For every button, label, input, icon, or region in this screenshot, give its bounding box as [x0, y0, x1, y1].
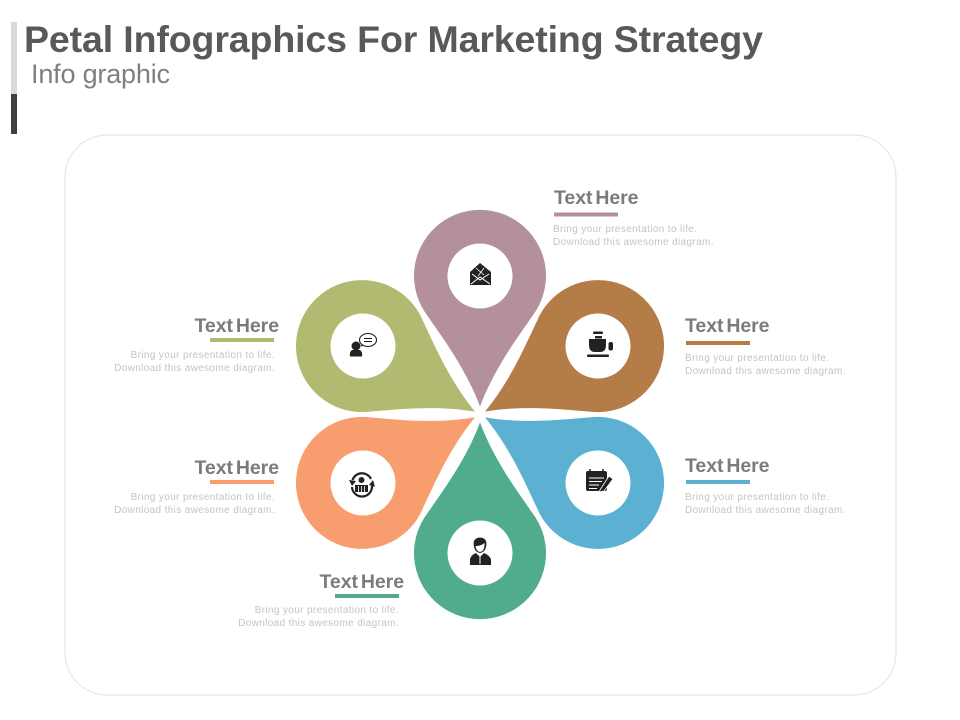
icon: coffee cup [587, 332, 613, 357]
petal: orange [272, 360, 508, 573]
label: left orange [114, 457, 279, 516]
label: right brown: Bring your presentation to life. [685, 353, 829, 364]
label: top mauve: Download this awesome diagram. [553, 237, 714, 248]
icon: open envelope [470, 263, 491, 285]
label: top mauve: Text Here [554, 187, 639, 209]
petal: green [414, 422, 546, 619]
label: left orange: Bring your presentation to life. [131, 492, 275, 503]
label: left olive [114, 315, 279, 374]
label: right brown: Download this awesome diagram. [685, 366, 846, 377]
label: top mauve: Bring your presentation to life. [553, 224, 697, 235]
petal: blue [452, 360, 688, 573]
icon: team with circular arrows [349, 473, 375, 497]
label: right blue [685, 455, 846, 516]
label: right blue: Bring your presentation to life. [685, 492, 829, 503]
label: left orange: Download this awesome diagram. [114, 505, 275, 516]
label: bottom green: Download this awesome diagram. [238, 618, 399, 629]
petal: brown [452, 256, 688, 469]
label: bottom green: Text Here [320, 571, 404, 593]
label: bottom green: Bring your presentation to life. [255, 605, 399, 616]
title: Petal Infographics For Marketing Strategy [24, 18, 763, 60]
icon: person with speech bubble [350, 334, 376, 356]
label: right blue: Text Here [685, 455, 770, 477]
panel: diagram background [65, 135, 896, 695]
title accent bar [11, 22, 17, 134]
subtitle: Info graphic [31, 59, 170, 89]
petal: mauve [414, 210, 546, 406]
label: right brown: Text Here [685, 315, 770, 337]
icon: calendar with pencil [586, 469, 613, 492]
icon: businessman [470, 538, 491, 565]
label: right blue: Download this awesome diagram. [685, 505, 846, 516]
petal: olive [272, 256, 508, 469]
label: right brown [685, 315, 846, 377]
label: left olive: Text Here [195, 315, 279, 337]
label: left orange: Text Here [195, 457, 279, 479]
petal diagram [272, 210, 688, 619]
label: bottom green [238, 571, 404, 629]
label: top mauve [553, 187, 714, 248]
label: left olive: Bring your presentation to life. [131, 350, 275, 361]
label: left olive: Download this awesome diagram. [114, 363, 275, 374]
